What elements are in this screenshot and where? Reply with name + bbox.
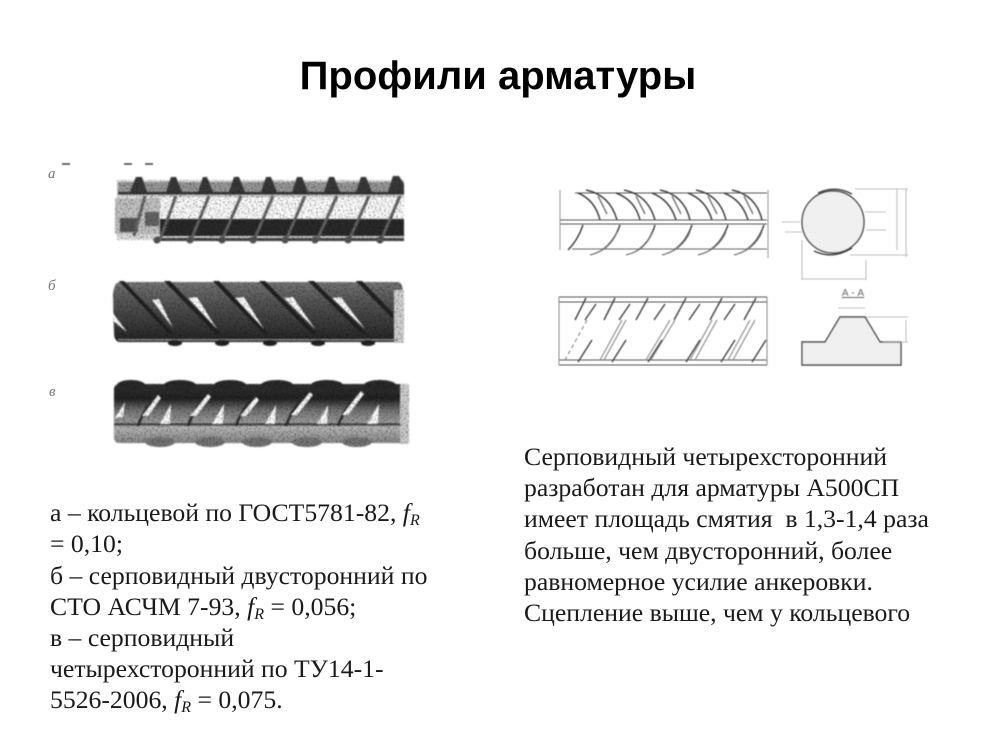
scan marks <box>62 163 153 165</box>
drawing: A-A section label: А - А <box>842 288 864 299</box>
text block: left legend: четырехсторонний по ТУ14-1- <box>50 654 384 683</box>
text block: right description: имеет площадь смятия в 1,3-1,4 раза <box>524 504 929 533</box>
panel: rebar photographs <box>48 163 409 447</box>
photo: ring profile rebar a <box>115 176 404 244</box>
photo label v: в <box>49 384 56 400</box>
text block: left legend: = 0,056; <box>264 592 356 621</box>
text block: left legend: а – кольцевой по ГОСТ5781-82, f <box>50 498 410 527</box>
photo: crescent four-sided rebar v <box>114 380 409 447</box>
text block: left legend: 5526-2006, f <box>50 685 181 714</box>
text block: right description: разработан для арматуры А500СП <box>524 473 899 502</box>
text block: left legend: = 0,075. <box>191 685 283 714</box>
text block: left legend: в – серповидный <box>50 623 234 652</box>
photo label b: б <box>48 278 56 294</box>
panel: technical drawings <box>559 189 908 365</box>
title: Профили арматуры <box>300 54 696 98</box>
drawing: two-sided crescent rebar side view <box>559 297 767 365</box>
drawing: cross-section circle <box>782 189 908 280</box>
text block: right description: равномерное усилие анкеровки. <box>524 567 873 596</box>
text block: right description: больше, чем двусторонний, более <box>524 536 892 565</box>
photo: crescent two-sided rebar b <box>113 281 404 346</box>
photo label a: а <box>48 166 56 182</box>
text block: left legend: R <box>409 512 420 529</box>
drawing: four-sided crescent rebar side view <box>560 190 768 258</box>
text block: right description: Серповидный четырехсторонний <box>524 442 887 471</box>
text block: right description: Сцепление выше, чем у кольцевого <box>524 598 910 627</box>
text block: left legend: = 0,10; <box>50 529 123 558</box>
text block: left legend: б – серповидный двусторонний по <box>50 561 427 590</box>
text block: left legend: R <box>253 606 264 623</box>
text block: left legend: СТО АСЧМ 7-93, f <box>50 592 254 621</box>
text block: left legend: R <box>180 699 191 716</box>
drawing: rib profile section <box>802 308 908 365</box>
